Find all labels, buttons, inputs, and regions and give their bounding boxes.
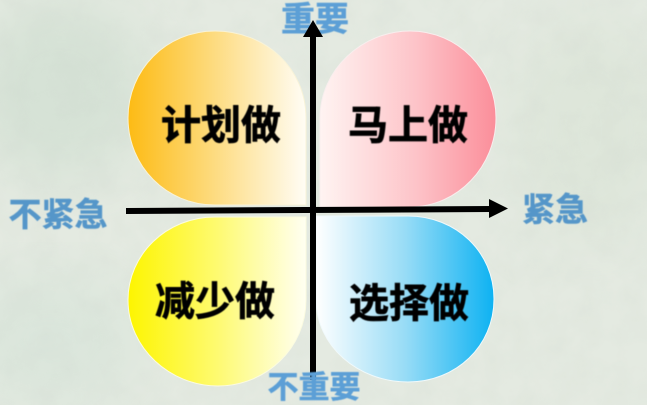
panel: do less: 减少做 xyxy=(155,280,275,324)
panel: do less xyxy=(128,217,306,386)
panel: do now xyxy=(320,31,496,207)
panel: plan to do: 计划做 xyxy=(161,104,281,148)
label: urgent: 紧急 xyxy=(522,191,588,228)
arrow: horizontal axis xyxy=(126,199,508,218)
panel: plan to do xyxy=(128,31,306,205)
arrow: vertical axis xyxy=(303,20,323,380)
label: not urgent: 不紧急 xyxy=(8,196,108,233)
panel: selective do: 选择做 xyxy=(349,282,469,326)
panel: do now: 马上做 xyxy=(348,104,468,148)
panel: selective do xyxy=(316,216,494,382)
label: not important: 不重要 xyxy=(268,370,360,405)
label: important: 重要 xyxy=(281,1,349,39)
